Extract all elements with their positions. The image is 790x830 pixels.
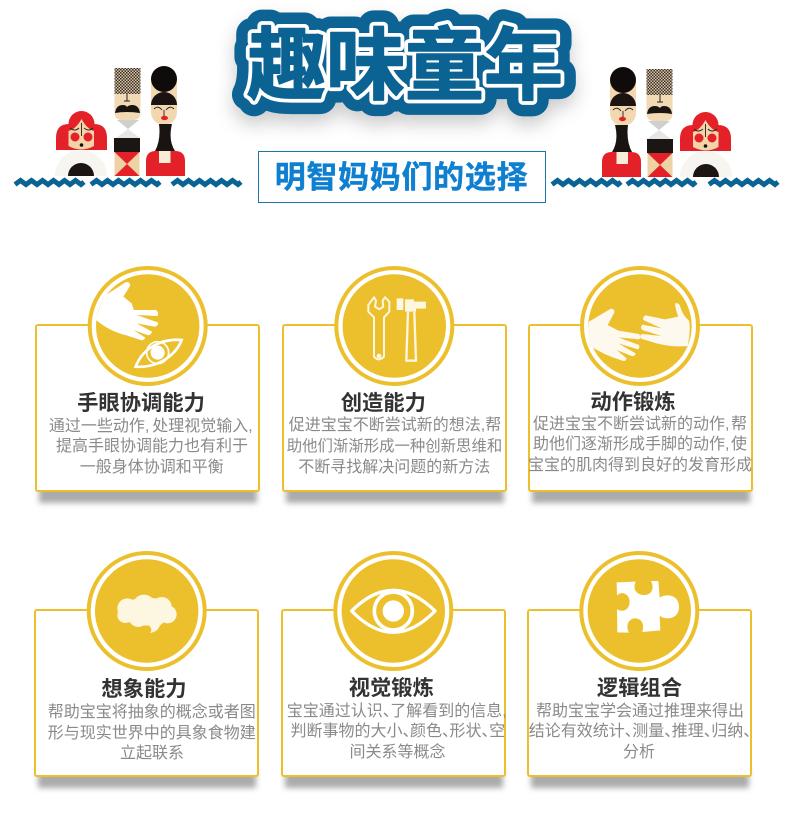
icon: hand and eye [90, 268, 206, 384]
text block: 提高手眼协调能力也有利于 [56, 437, 248, 455]
text block [528, 415, 752, 474]
heading: 想象能力 [101, 677, 187, 701]
decoration: left wooden toy figures [55, 66, 185, 176]
icon: eye [335, 553, 451, 669]
text block: 助他们渐渐形成一种创新思维和 [287, 437, 502, 455]
heading: 创造能力 [341, 391, 426, 415]
panel: creativity [283, 268, 506, 503]
text block: 促进宝宝不断尝试新的想法,帮 [289, 416, 501, 434]
heading: 动作锻炼 [590, 390, 676, 414]
panel: movement exercise [528, 268, 752, 503]
subtitle box: 明智妈妈们的选择 [275, 160, 528, 195]
text block [529, 702, 759, 761]
text block [48, 702, 256, 762]
text block [287, 702, 507, 761]
panel: imagination [35, 553, 258, 788]
text block: 立起联系 [120, 744, 184, 762]
icon: cloud speech bubble [89, 553, 205, 669]
text block [287, 416, 502, 476]
panel: logic [528, 553, 759, 788]
text block: 判断事物的大小、颜色、形状、空 [291, 722, 505, 740]
panel: visual exercise [282, 553, 507, 788]
text block: 一般身体协调和平衡 [80, 458, 224, 476]
title: 趣味童年 [247, 21, 563, 110]
text block: 不断寻找解决问题的新方法 [298, 458, 490, 476]
text block: 结论有效统计、测量、推理、归纳、 [529, 722, 759, 740]
panel: hand-eye coordination [36, 268, 259, 503]
heading: 手眼协调能力 [77, 391, 205, 415]
title: 趣味童年 [247, 21, 563, 110]
text block [49, 417, 253, 476]
decoration: right wooden toy figures [602, 67, 732, 177]
text block: 间关系等概念 [349, 742, 446, 761]
title: 趣味童年 [247, 21, 563, 110]
decoration: left blue waves [15, 180, 241, 184]
text block: 宝宝的肌肉得到良好的发育形成 [528, 456, 752, 474]
heading: 逻辑组合 [597, 676, 682, 700]
decoration: right blue waves [552, 180, 778, 184]
text block: 宝宝通过认识、了解看到的信息, [287, 702, 507, 720]
text block: 形与现实世界中的具象食物建 [48, 724, 256, 742]
heading: 视觉锻炼 [349, 676, 434, 700]
subtitle box [258, 152, 546, 202]
text block: 帮助宝宝将抽象的概念或者图 [48, 702, 256, 721]
icon: wrench and hammer [336, 268, 452, 384]
icon: two hands [582, 268, 698, 384]
icon: puzzle piece [581, 553, 697, 669]
text block: 帮助宝宝学会通过推理来得出 [536, 702, 744, 720]
text block: 促进宝宝不断尝试新的动作,帮 [533, 415, 747, 433]
text block: 分析 [623, 743, 655, 761]
text block: 通过一些动作,处理视觉输入, [49, 417, 253, 435]
text block: 助他们逐渐形成手脚的动作,使 [533, 435, 747, 453]
